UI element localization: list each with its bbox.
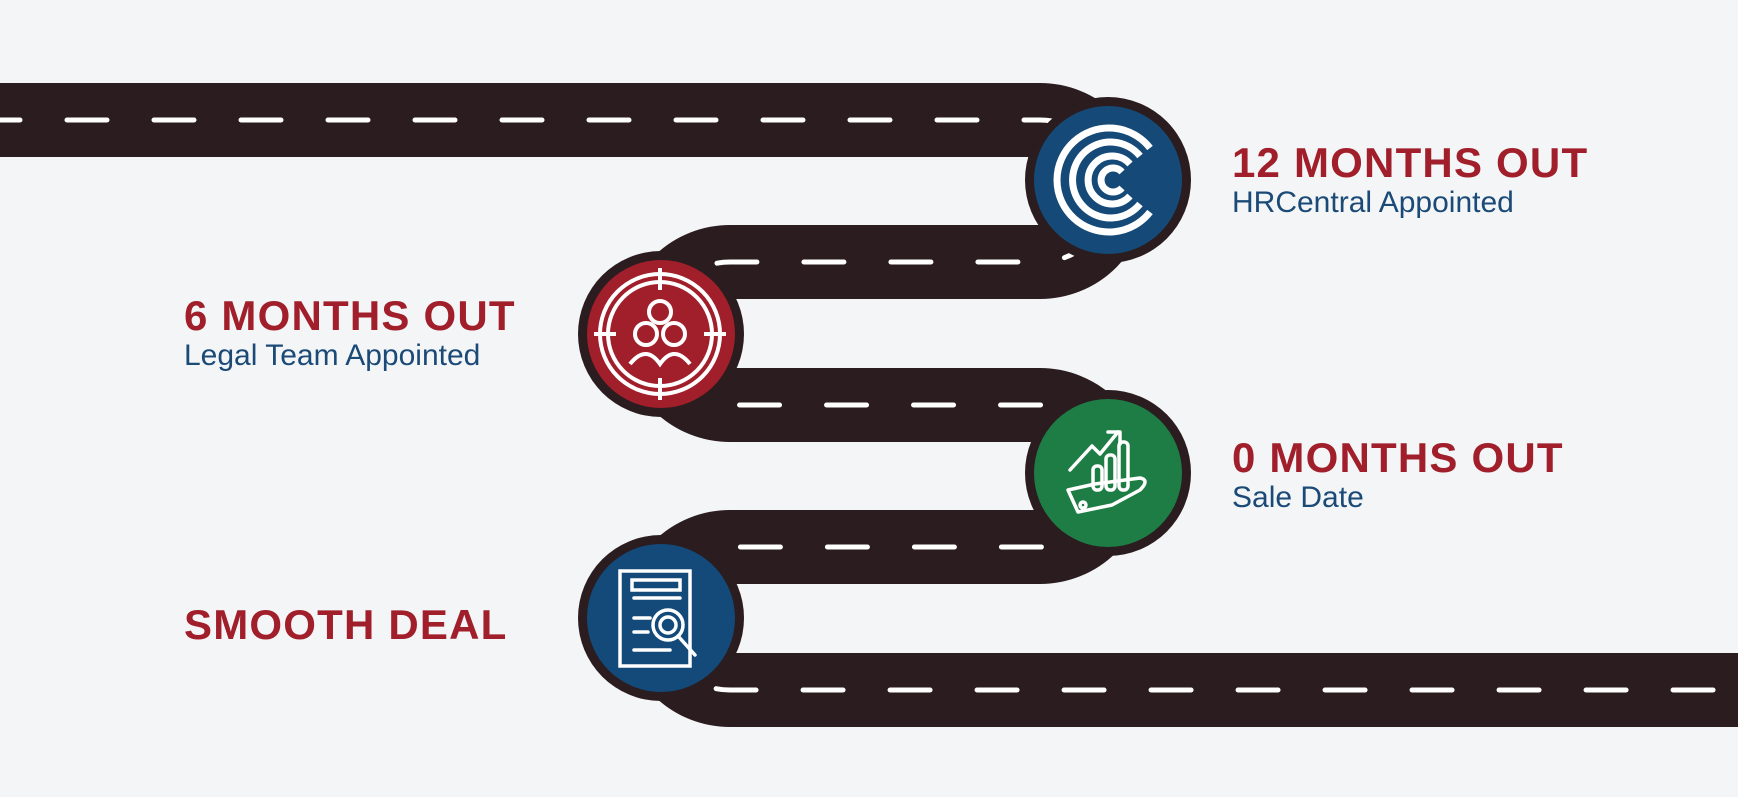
icon: sale chart hand [1025,390,1191,556]
heading: 0 months out [1232,434,1564,514]
heading: 12 months out [1232,139,1588,219]
heading: 6 months out [184,292,516,372]
icon: HRCentral logo circle [1025,97,1191,263]
icon: legal team target [578,251,744,417]
heading: smooth deal: SMOOTH DEAL [184,601,508,648]
heading: 6 months out: 6 MONTHS OUT [184,292,516,339]
heading: 12 months out: 12 MONTHS OUT [1232,139,1588,186]
subtitle: Sale Date: Sale Date [1232,481,1364,514]
subtitle: Legal Team Appointed: Legal Team Appointed [184,339,480,372]
subtitle: HRCentral Appointed: HRCentral Appointed [1232,186,1514,219]
heading: 0 months out: 0 MONTHS OUT [1232,434,1564,481]
icon: document search [578,535,744,701]
